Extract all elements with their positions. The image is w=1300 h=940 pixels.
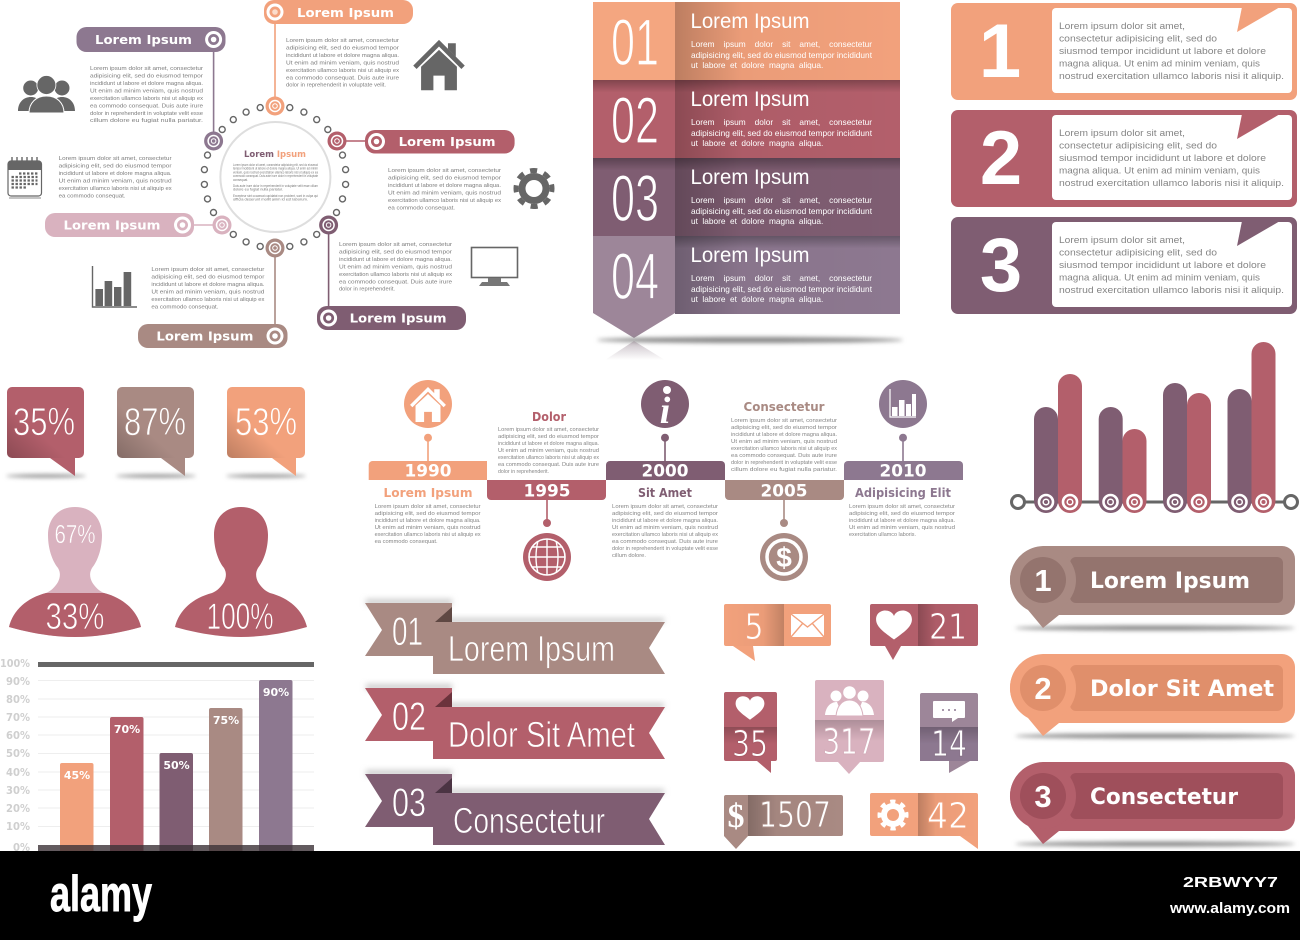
footer logo: alamy xyxy=(50,866,152,922)
row 04 with arrow tab: ut labore et dolore magna aliqua. xyxy=(691,294,823,304)
y axis labels: 10% xyxy=(6,821,30,833)
bubble 87%: 87% xyxy=(124,401,186,444)
centre circle: Lorem ipsum dolor sit amet, consectetur adipisicing elit, sed do eiusmod xyxy=(233,163,318,167)
badge: mail 5: 5 xyxy=(744,607,764,648)
icon: house xyxy=(413,40,465,90)
panel: circular process diagram xyxy=(8,0,552,348)
milestone 2010 text: adipisicing elit, sed do eiusmod tempor xyxy=(849,511,955,517)
year bar 2000 xyxy=(606,461,725,482)
ribbon 01 xyxy=(365,599,665,674)
pill: orange xyxy=(264,0,413,24)
text block: monitor: Lorem ipsum dolor sit amet, consectetur xyxy=(339,242,452,248)
milestone 1995 text: incididunt ut labore et dolore magna aliqua. xyxy=(498,441,599,447)
milestone 2000 text: adipisicing elit, sed do eiusmod tempor xyxy=(612,511,718,517)
pill: plum: Lorem Ipsum xyxy=(350,310,447,326)
icon: info circle xyxy=(641,380,689,432)
centre circle: Lorem Ipsum xyxy=(244,150,306,160)
row 02: Lorem Ipsum xyxy=(690,88,810,111)
footer url: www.alamy.com xyxy=(1169,900,1290,917)
ribbon 02: 02 xyxy=(392,695,426,739)
text block: people xyxy=(90,66,203,124)
pill: pink: Lorem Ipsum xyxy=(64,218,160,232)
milestone 2005 text: dolor in reprehenderit in voluptate velit esse xyxy=(731,460,837,466)
ribbon 02 xyxy=(365,684,665,759)
callout 2: siusmod tempor incididunt ut labore et dolore xyxy=(1059,153,1266,164)
milestone 1990 text: adipisicing elit, sed do eiusmod tempor xyxy=(375,511,481,517)
ribbon 03: Consectetur xyxy=(453,800,605,841)
y axis labels: 30% xyxy=(6,785,30,797)
text block: monitor xyxy=(339,242,452,293)
milestone 1995 text: Lorem ipsum dolor sit amet, consectetur xyxy=(498,427,599,433)
text block: house: Ut enim ad minim veniam, quis nostrud xyxy=(286,60,399,66)
centre circle: officia deserunt mollit anim id est laborum. xyxy=(233,198,308,202)
row 02 xyxy=(593,80,900,158)
milestone 2005 text: Lorem ipsum dolor sit amet, consectetur xyxy=(731,418,837,424)
text block: house: ea commodo consequat. Duis aute irure xyxy=(286,75,399,81)
person 67/33: 33% xyxy=(46,596,104,637)
icon: globe circle xyxy=(523,533,571,581)
y axis labels: 60% xyxy=(6,730,30,742)
text block: chart: ea commodo consequat. xyxy=(151,304,218,310)
pill: plum xyxy=(317,306,466,330)
ribbon 01: Lorem Ipsum xyxy=(448,628,615,669)
text block: gear: Ut enim ad minim veniam, quis nostrud xyxy=(388,190,501,196)
person 100 xyxy=(175,507,307,637)
text block: chart: incididunt ut labore et dolore magna aliqua. xyxy=(151,282,264,288)
bar 75%: 75% xyxy=(213,714,239,727)
y axis labels: 50% xyxy=(6,748,30,760)
row 02: Lorem ipsum dolor sit amet, consectetur xyxy=(691,117,872,127)
icon: people xyxy=(18,76,75,113)
y axis labels: 70% xyxy=(6,712,30,724)
text block: monitor: incididunt ut labore et dolore magna aliqua. xyxy=(339,257,452,263)
text block: gear: adipisicing elit, sed do eiusmod tempor xyxy=(388,176,501,182)
text block: people: incididunt ut labore et dolore magna aliqua. xyxy=(90,81,203,87)
milestone 2005 text xyxy=(731,400,838,473)
panel: person percent figures xyxy=(9,507,307,637)
text block: people: dolor in reprehenderit in voluptate velit esse xyxy=(90,111,203,117)
panel: percent bubbles xyxy=(6,387,306,478)
milestone 2000 text: cillum dolore. xyxy=(612,553,646,559)
milestone 2005 text: adipisicing elit, sed do eiusmod tempor xyxy=(731,425,837,431)
milestone 1990 text: exercitation ullamco laboris nisi ut aliquip ex xyxy=(375,532,481,538)
pill: taupe: Lorem Ipsum xyxy=(156,328,253,344)
milestone 1990 text xyxy=(375,486,481,545)
person 67/33 xyxy=(9,507,141,637)
milestone 2010 text: Adipisicing Elit xyxy=(855,486,951,500)
ribbon 01: 01 xyxy=(392,610,423,654)
bar 90%: 90% xyxy=(263,686,289,699)
milestone 2005 text: Ut enim ad minim veniam, quis nostrud xyxy=(731,439,837,445)
callout 2: 2 xyxy=(980,116,1022,201)
year bar 2010 xyxy=(844,461,963,482)
text block: people: Ut enim ad minim veniam, quis nostrud xyxy=(90,88,203,94)
footer bar xyxy=(0,851,1300,940)
row 03: adipisicing elit, sed do eiusmod tempor incididunt xyxy=(691,206,873,216)
pill: mauve: Lorem Ipsum xyxy=(95,32,192,47)
text block: gear: exercitation ullamco laboris nisi ut aliquip ex xyxy=(388,198,501,204)
milestone 2000 text: Ut enim ad minim veniam, quis nostrud xyxy=(612,525,718,531)
milestone 2005 text: exercitation ullamco laboris nisi ut aliquip ex xyxy=(731,446,838,452)
row 01: Lorem ipsum dolor sit amet, consectetur xyxy=(691,39,872,49)
chart: percentage bar chart xyxy=(0,658,314,854)
pill: red: Lorem Ipsum xyxy=(399,134,496,149)
callout 1: consectetur adipisicing elit, sed do xyxy=(1059,34,1217,44)
milestone 1990 text: Lorem Ipsum xyxy=(384,486,472,500)
milestone 2010 text: Ut enim ad minim veniam, quis nostrud xyxy=(849,525,955,531)
callout 3: 3 xyxy=(980,223,1022,308)
bar 90% xyxy=(259,680,292,853)
label 3: Consectetur xyxy=(1090,785,1238,810)
bubble 53%: 53% xyxy=(235,401,297,444)
centre circle xyxy=(220,122,330,232)
text block: calendar: Lorem ipsum dolor sit amet, consectetur xyxy=(59,156,172,162)
y axis labels: 40% xyxy=(6,767,30,779)
pill: taupe xyxy=(138,324,288,348)
milestone 1990 text: Ut enim ad minim veniam, quis nostrud xyxy=(375,525,481,531)
label 2: Dolor Sit Amet xyxy=(1090,677,1274,702)
callout 1: magna aliqua. Ut enim ad minim veniam, quis xyxy=(1059,58,1260,70)
milestone 2000 text: incididunt ut labore et dolore magna aliqua. xyxy=(612,518,718,524)
panel: social badges xyxy=(724,604,978,849)
panel: timeline xyxy=(369,380,963,581)
callout 2: Lorem ipsum dolor sit amet, xyxy=(1059,128,1185,139)
text block: chart: adipisicing elit, sed do eiusmod tempor xyxy=(151,274,265,280)
text block: calendar: adipisicing elit, sed do eiusmod tempor xyxy=(59,164,172,170)
badge: heart 35 xyxy=(724,692,777,773)
text block: gear xyxy=(388,168,501,211)
text block: chart: Ut enim ad minim veniam, quis nostrud xyxy=(151,289,264,295)
callout 1 xyxy=(951,3,1297,100)
row 01: adipisicing elit, sed do eiusmod tempor incididunt xyxy=(691,50,873,60)
text block: house: adipisicing elit, sed do eiusmod tempor xyxy=(286,46,399,52)
text block: people: Lorem ipsum dolor sit amet, consectetur xyxy=(90,66,203,72)
text block: people: ea commodo consequat. Duis aute irure xyxy=(90,103,203,109)
label 1 xyxy=(1010,546,1295,630)
text block: calendar: incididunt ut labore et dolore magna aliqua. xyxy=(59,171,172,177)
text block: monitor: ea commodo consequat. Duis aute irure xyxy=(339,279,452,285)
text block: monitor: Ut enim ad minim veniam, quis nostrud xyxy=(339,264,452,270)
badge: gear 42: 42 xyxy=(927,796,969,837)
milestone 1995 text: ea commodo consequat. Duis aute irure xyxy=(498,462,599,468)
pill: pink xyxy=(45,213,194,237)
icon: dollar circle: $ xyxy=(776,542,792,573)
milestone 1995 text: exercitation ullamco laboris nisi ut aliquip ex xyxy=(498,455,600,461)
text block: people: exercitation ullamco laboris nisi ut aliquip ex xyxy=(90,96,203,102)
text block: house: incididunt ut labore et dolore magna aliqua. xyxy=(286,53,399,59)
row 02: 02 xyxy=(611,83,659,157)
text block: monitor: exercitation ullamco laboris nisi ut aliquip ex xyxy=(339,272,452,278)
year bar 2005 xyxy=(725,480,844,502)
text block: calendar: ea commodo consequat. xyxy=(59,193,126,199)
row 01: ut labore et dolore magna aliqua. xyxy=(691,60,823,70)
text block: house: Lorem ipsum dolor sit amet, consectetur xyxy=(286,38,399,44)
icon: info circle: i xyxy=(660,390,671,432)
milestone 2000 text: dolor in reprehenderit in voluptate velit esse xyxy=(612,546,718,552)
y axis labels: 90% xyxy=(6,676,30,688)
person 100: 100% xyxy=(206,596,274,637)
y axis labels: 0% xyxy=(13,842,30,854)
text block: gear: Lorem ipsum dolor sit amet, consectetur xyxy=(388,168,501,174)
row 03: 03 xyxy=(611,161,659,235)
text block: monitor: adipisicing elit, sed do eiusmod tempor xyxy=(339,250,452,256)
connector lines xyxy=(194,24,365,324)
milestone 2005 text: Consectetur xyxy=(744,400,825,414)
ribbon 03 xyxy=(365,770,665,845)
milestone 2005 text: cillum dolore eu fugiat nulla pariatur. xyxy=(731,467,837,473)
text block: calendar: exercitation ullamco laboris nisi ut aliquip ex xyxy=(59,186,172,192)
callout 3 xyxy=(951,217,1297,314)
text block: chart: exercitation ullamco laboris nisi ut aliquip ex xyxy=(151,297,265,303)
ribbon 03: 03 xyxy=(392,781,426,825)
bubble 35%: 35% xyxy=(13,401,75,444)
row 01: Lorem Ipsum xyxy=(690,10,810,33)
centre circle: tempor incididunt ut labore et dolore magna aliqua. Ut enim ad minim xyxy=(233,167,318,171)
callout 1: 1 xyxy=(979,9,1021,94)
year bar 1995: 1995 xyxy=(524,482,570,502)
pill: mauve xyxy=(76,27,226,52)
panel: ribbon labels xyxy=(365,599,665,845)
badge: dollar 1507: 1507 xyxy=(759,795,831,836)
icon: calendar xyxy=(8,157,42,198)
chart: paired rounded bars xyxy=(1012,342,1298,513)
text block: people: cillum dolore eu fugiat nulla pariatur. xyxy=(90,118,203,124)
callout 3: magna aliqua. Ut enim ad minim veniam, quis xyxy=(1059,272,1260,284)
milestone 2000 text: exercitation ullamco laboris nisi ut aliquip ex xyxy=(612,532,719,538)
text block: house xyxy=(286,38,399,89)
bubble 53% xyxy=(226,387,306,478)
badge: heart 21: 21 xyxy=(929,607,967,648)
panel: pin labels xyxy=(1010,546,1295,846)
year bar 2005: 2005 xyxy=(760,482,808,502)
row 03 xyxy=(593,158,900,236)
callout 3: nostrud exercitation ullamco laboris nisi it aliquip. xyxy=(1059,285,1284,296)
badge: gear 42 xyxy=(870,793,978,849)
stems and dots xyxy=(424,434,907,527)
large nodes xyxy=(204,96,346,258)
icon: gear xyxy=(516,170,552,206)
label 3: 3 xyxy=(1034,779,1052,814)
year bar 2010: 2010 xyxy=(880,462,927,482)
row 04 with arrow tab: adipisicing elit, sed do eiusmod tempor incididunt xyxy=(691,284,873,294)
callout 3: siusmod tempor incididunt ut labore et dolore xyxy=(1059,260,1266,271)
milestone 1995 text xyxy=(498,410,600,475)
centre circle: commodo consequat. Duis aute irure dolor in reprehenderit in voluptate xyxy=(233,174,318,178)
label 1: Lorem Ipsum xyxy=(1090,569,1250,594)
callout 2: consectetur adipisicing elit, sed do xyxy=(1059,140,1217,152)
milestone 1995 text: dolor in reprehenderit. xyxy=(498,469,549,475)
text block: people: adipisicing elit, sed do eiusmod tempor xyxy=(90,74,203,80)
row 04 with arrow tab: 04 xyxy=(611,239,659,313)
milestone 2000 text: ea commodo consequat. Duis aute irure xyxy=(612,539,718,545)
row 04 with arrow tab: Lorem ipsum dolor sit amet, consectetur xyxy=(691,273,872,283)
y axis labels xyxy=(0,658,30,854)
badge: dollar 1507: $ xyxy=(728,798,744,835)
callout 1: nostrud exercitation ullamco laboris nisi it aliquip. xyxy=(1059,71,1284,82)
shadow under list xyxy=(597,337,903,360)
centre circle: veniam, quis nostrud exercitation ullamco laboris nisi ut aliquip ex ea xyxy=(233,170,318,174)
text block: gear: ea commodo consequat. xyxy=(388,205,455,211)
badge: mail 5 xyxy=(724,604,831,661)
label 2 xyxy=(1010,654,1295,738)
label 1: 1 xyxy=(1034,563,1052,598)
milestone 1995 text: adipisicing elit, sed do eiusmod tempor xyxy=(498,434,599,440)
bar 45% xyxy=(60,763,94,853)
y axis labels: 80% xyxy=(6,694,30,706)
ring of small dots xyxy=(201,105,349,249)
callout 2: magna aliqua. Ut enim ad minim veniam, quis xyxy=(1059,166,1260,176)
row 01 xyxy=(593,2,900,80)
text block: chart: Lorem ipsum dolor sit amet, consectetur xyxy=(151,267,265,273)
panel: numbered callouts 1-3 xyxy=(951,3,1297,314)
milestone 2010 text xyxy=(849,486,955,538)
row 04 with arrow tab xyxy=(593,236,900,338)
bar 50%: 50% xyxy=(163,759,190,772)
person 67/33: 67% xyxy=(54,519,96,549)
milestone 1990 text: incididunt ut labore et dolore magna aliqua. xyxy=(375,518,481,524)
badge: people 317: 317 xyxy=(822,722,876,763)
row 01: 01 xyxy=(611,5,659,79)
callout 1: siusmod tempor incididunt ut labore et dolore xyxy=(1059,46,1266,57)
badge: people 317 xyxy=(815,680,884,774)
text block: house: exercitation ullamco laboris nisi ut aliquip ex xyxy=(286,68,399,74)
row 03: Lorem ipsum dolor sit amet, consectetur xyxy=(691,195,872,205)
y axis labels: 20% xyxy=(6,803,30,815)
bar 70% xyxy=(110,717,144,853)
milestone 1990 text: Lorem ipsum dolor sit amet, consectetur xyxy=(375,504,481,510)
bubble 87% xyxy=(116,387,196,478)
row 04 with arrow tab: Lorem Ipsum xyxy=(690,244,810,267)
callout 3: consectetur adipisicing elit, sed do xyxy=(1059,248,1217,258)
milestone 1990 text: ea commodo consequat. xyxy=(375,539,438,545)
bar 50% xyxy=(160,753,193,853)
row 03: ut labore et dolore magna aliqua. xyxy=(691,216,823,226)
milestone 1995 text: Ut enim ad minim veniam, quis nostrud xyxy=(498,448,599,454)
callout 2: nostrud exercitation ullamco laboris nisi it aliquip. xyxy=(1059,178,1284,189)
bubble 35% xyxy=(6,387,86,478)
ribbon 02: Dolor Sit Amet xyxy=(448,714,635,755)
footer image id: 2RBWYY7 xyxy=(1183,874,1278,891)
row 02: ut labore et dolore magna aliqua. xyxy=(691,138,823,148)
text block: gear: incididunt ut labore et dolore magna aliqua. xyxy=(388,183,501,189)
milestone 2005 text: incididunt ut labore et dolore magna aliqua. xyxy=(731,432,837,438)
badge: dollar 1507 xyxy=(724,795,843,849)
label 3 xyxy=(1010,762,1295,846)
milestone 2005 text: ea commodo consequat. Duis aute irure xyxy=(731,453,837,459)
milestone 1995 text: Dolor xyxy=(532,410,566,424)
icon: dollar circle xyxy=(760,533,808,581)
text block: chart xyxy=(151,267,265,310)
bar 75% xyxy=(209,708,242,853)
badge: heart 21 xyxy=(870,604,978,660)
callout 3: Lorem ipsum dolor sit amet, xyxy=(1059,235,1185,246)
milestone 2010 text: incididunt ut labore et dolore magna aliqua. xyxy=(849,518,955,524)
text block: calendar: Ut enim ad minim veniam, quis nostrud xyxy=(59,178,172,184)
callout 1: Lorem ipsum dolor sit amet, xyxy=(1059,21,1185,32)
milestone 2010 text: Lorem ipsum dolor sit amet, consectetur xyxy=(849,504,955,510)
icon: bar chart xyxy=(92,266,137,307)
badge: chat 14 xyxy=(920,693,978,773)
icon: monitor xyxy=(472,248,518,286)
centre circle: Excepteur sint occaecat cupidatat non proident, sunt in culpa qui xyxy=(233,194,318,198)
milestone 2000 text: Sit Amet xyxy=(638,486,692,500)
panel: numbered list 01-04 xyxy=(593,2,903,360)
pill: red xyxy=(365,130,515,154)
label 2: 2 xyxy=(1034,671,1052,706)
badge: chat 14: 14 xyxy=(931,724,967,765)
centre circle: Duis aute irure dolor in reprehenderit in voluptate velit esse cillum xyxy=(233,184,318,188)
badge: heart 35: 35 xyxy=(732,724,768,765)
year bar 1990: 1990 xyxy=(404,462,452,482)
text block: calendar xyxy=(59,156,172,199)
year bar 1990 xyxy=(369,461,487,482)
icon: chart circle xyxy=(879,380,927,428)
year bar 1995 xyxy=(487,480,606,502)
bar 70%: 70% xyxy=(114,723,140,736)
bar 45%: 45% xyxy=(64,769,90,782)
pill: orange: Lorem Ipsum xyxy=(297,5,394,20)
year bar 2000: 2000 xyxy=(642,462,689,482)
milestone 2010 text: exercitation ullamco laboris. xyxy=(849,532,916,538)
milestone 2000 text xyxy=(612,486,719,559)
centre circle: dolore eu fugiat nulla pariatur. xyxy=(233,188,283,192)
row 03: Lorem Ipsum xyxy=(690,166,810,189)
y axis labels: 100% xyxy=(0,658,30,670)
text block: house: dolor in reprehenderit in voluptate velit. xyxy=(286,83,386,89)
centre circle: consequat. xyxy=(233,178,248,182)
text block: monitor: dolor in reprehenderit. xyxy=(339,287,395,293)
callout 2 xyxy=(951,110,1297,207)
milestone 2000 text: Lorem ipsum dolor sit amet, consectetur xyxy=(612,504,718,510)
row 02: adipisicing elit, sed do eiusmod tempor incididunt xyxy=(691,128,873,138)
icon: house circle xyxy=(404,380,452,428)
